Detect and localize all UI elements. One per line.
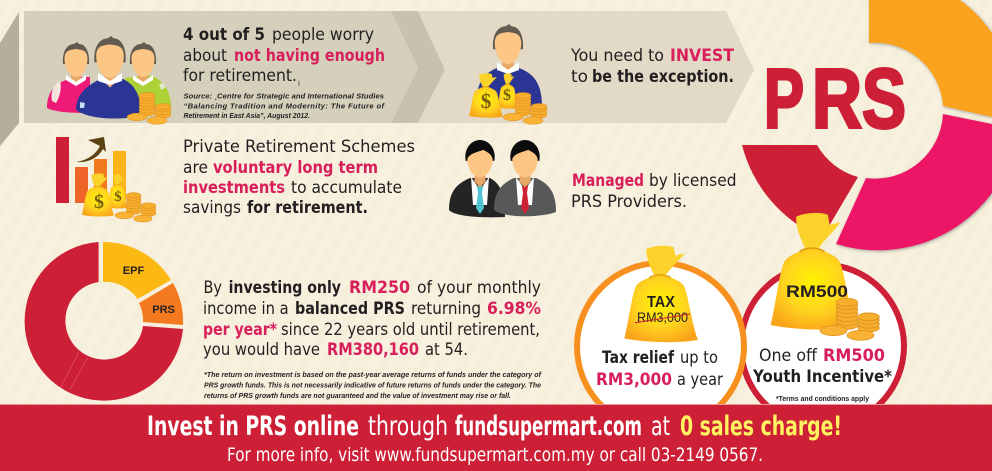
icon: two businessmen [449, 140, 556, 217]
contact line: For more info, visit www.fundsupermart.com.my or call 03-2149 0567. [227, 444, 763, 466]
text block: 4 out of 5 [183, 25, 385, 88]
segment: main red [25, 242, 183, 401]
source note [184, 92, 385, 120]
text block: investing RM250: returning [411, 299, 481, 318]
left arrow tail [0, 12, 19, 146]
text block: private retirement schemes: are [183, 158, 208, 177]
icon: bar chart with money bags: $ [114, 189, 122, 205]
text block: private retirement schemes: investments [183, 178, 285, 197]
title: PRS: R [812, 52, 862, 146]
text: one off RM500: RM500 [823, 346, 885, 365]
text block: 4 out of 5: not having enough [234, 46, 385, 65]
text: tax relief: Tax relief [602, 348, 675, 367]
terms note: *Terms and conditions apply [776, 394, 870, 403]
text block: invest [570, 46, 735, 86]
panel: worry banner [24, 11, 445, 123]
text block: invest: to [571, 67, 588, 86]
text block: private retirement schemes: to accumulate [291, 178, 402, 197]
text block: managed: PRS Providers. [571, 192, 687, 211]
icon: investor with money bags: $ [503, 87, 511, 104]
segment: PRS: PRS [152, 304, 175, 316]
text block: invest: INVEST [670, 46, 735, 65]
source note: Retirement in East Asia”, August 2012. [184, 111, 310, 120]
text block: private retirement schemes: for retirement. [247, 198, 368, 217]
text block: invest: You need to [570, 46, 664, 65]
text block: investing RM250: RM250 [349, 278, 410, 297]
panel: invest banner [418, 11, 754, 123]
text block: 4 out of 5: i [298, 80, 300, 88]
footer band [0, 404, 992, 471]
segment: pink [836, 114, 992, 250]
icon: RM500 bag with coins: RM500 [786, 282, 848, 301]
source note: “Balancing Tradition and Modernity: The Future of [184, 102, 385, 111]
chart: savings donut [25, 242, 183, 401]
text block: 4 out of 5: for retirement. [183, 66, 297, 85]
chart: PRS pie wheel [742, 0, 992, 250]
text block: private retirement schemes: Private Retirement Schemes [183, 137, 415, 156]
call to action: at [651, 411, 670, 442]
text block: managed: by licensed [649, 171, 736, 190]
footnote: PRS growth funds. This is not necessarily indicative of future returns of funds under the category. The [204, 380, 542, 390]
text block: private retirement schemes: voluntary long term [213, 158, 378, 177]
text block: investing RM250: income in a [203, 299, 289, 318]
icon: investor with money bags [469, 24, 547, 124]
text block: private retirement schemes: savings [183, 198, 241, 217]
icon: RM500 bag with coins [771, 213, 879, 340]
icon: three people with coins [47, 36, 171, 124]
call to action: 0 sales charge! [680, 411, 842, 442]
segment: PRS [139, 283, 183, 325]
text block: managed [571, 171, 736, 211]
icon: tax bag: TAX [647, 294, 675, 311]
segment: red [742, 145, 858, 238]
text: tax relief: RM3,000 [596, 370, 672, 389]
source note: Source: ¸Centre for Strategic and International Studies [184, 92, 384, 101]
text block: investing RM250: you would have [203, 340, 320, 359]
text: one off RM500 [752, 346, 892, 386]
footnote: returns of PRS growth funds are not guaranteed and the value of investment may rise or fall. [204, 391, 511, 400]
segment: EPF [103, 242, 171, 299]
icon: tax bag: RM3,000 [637, 310, 688, 325]
text block: investing RM250: By [204, 278, 222, 297]
text block: invest: be the exception. [592, 67, 734, 86]
text block: 4 out of 5: 4 out of 5 [183, 25, 265, 44]
call to action: fundsupermart.com [455, 411, 642, 442]
footnote: *The return on investment is based on the past-year average returns of funds under the category of [204, 370, 542, 379]
call to action: Invest in PRS online [147, 411, 359, 442]
text block: investing RM250: of your monthly [417, 278, 541, 297]
text block: investing RM250: investing only [229, 278, 341, 297]
text: tax relief: up to [680, 348, 718, 367]
call to action [147, 411, 842, 442]
call to action: through [368, 411, 448, 442]
text block: investing RM250: RM380,160 [327, 340, 419, 359]
title: PRS: P [764, 52, 804, 146]
text block: 4 out of 5: people worry [272, 25, 374, 44]
icon: bar chart with money bags [56, 137, 156, 222]
icon: tax bag [624, 246, 698, 342]
text block: investing RM250: since 22 years old until retirement, [281, 320, 540, 339]
title: PRS: S [862, 52, 906, 146]
text block: investing RM250: per year* [203, 320, 277, 339]
icon: bar chart with money bags: $ [94, 191, 104, 213]
text block: investing RM250: 6.98% [487, 299, 541, 318]
text: tax relief [596, 348, 723, 389]
text: tax relief: a year [677, 370, 723, 389]
footnote [204, 370, 542, 400]
panel: tax relief circle [577, 246, 744, 430]
text block: managed: Managed [572, 171, 644, 190]
segment: orange [869, 0, 992, 117]
text: one off RM500: Youth Incentive* [752, 367, 892, 386]
text block: investing RM250: at 54. [425, 340, 468, 359]
title: PRS [764, 52, 906, 146]
text: one off RM500: One off [759, 346, 818, 365]
segment: EPF: EPF [123, 265, 144, 277]
text block: private retirement schemes [183, 137, 415, 217]
panel: youth incentive circle [741, 264, 904, 428]
text block: investing RM250: balanced PRS [295, 299, 405, 318]
chevron arrow [391, 11, 445, 123]
text block: investing RM250 [203, 278, 541, 359]
icon: investor with money bags: $ [481, 89, 491, 113]
text block: 4 out of 5: about [183, 46, 227, 65]
